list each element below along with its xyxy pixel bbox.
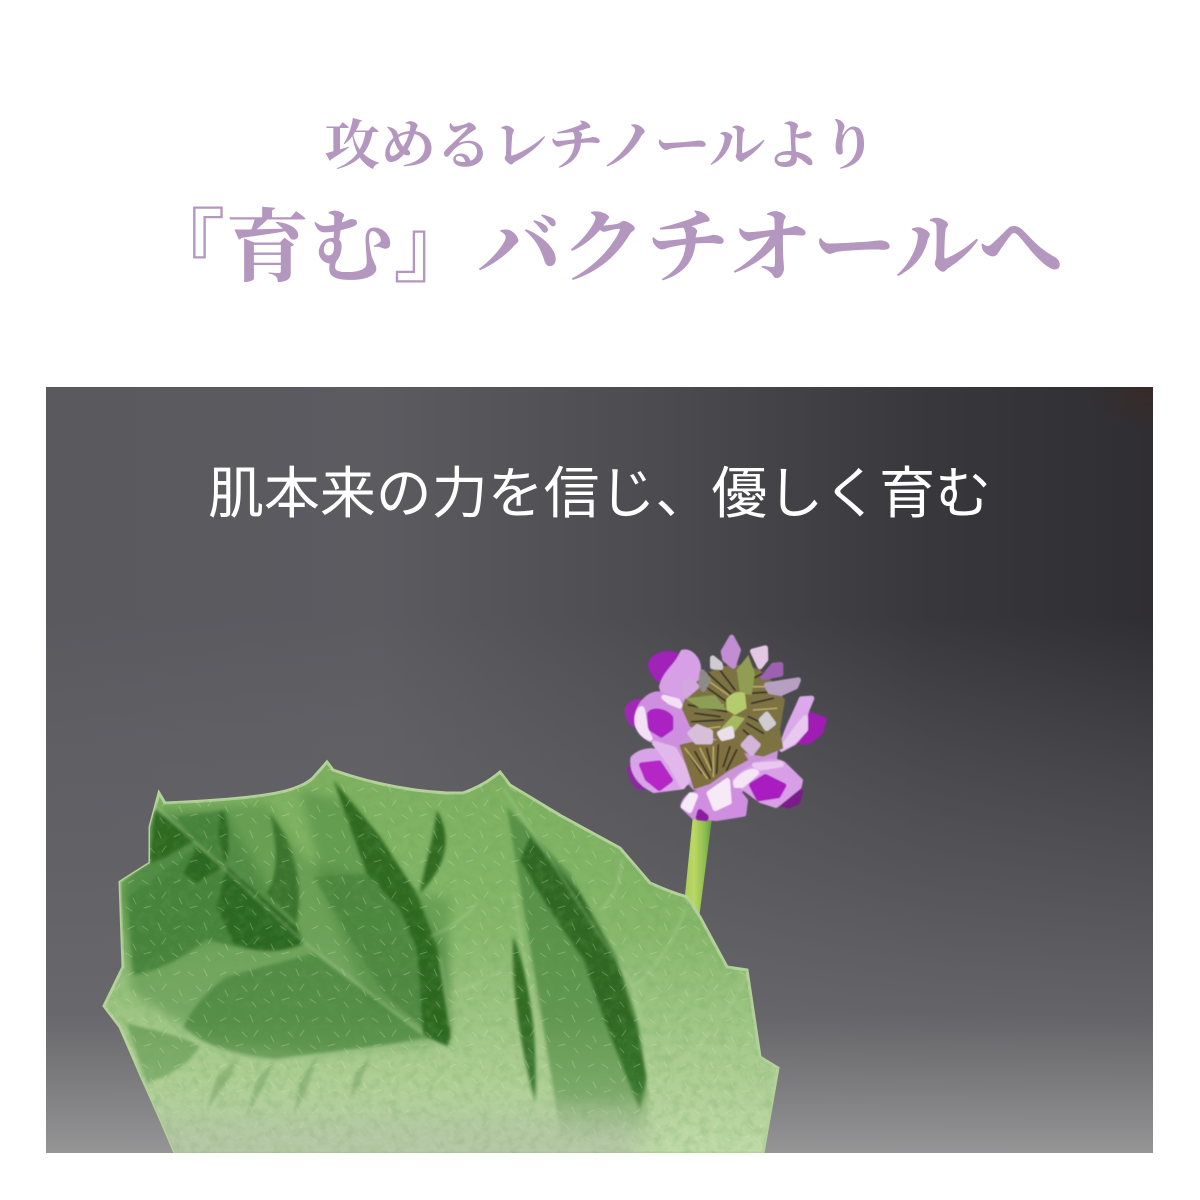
pink petals	[633, 652, 812, 818]
illustration: leaf	[90, 755, 790, 1175]
flower centre: olive sepals	[679, 655, 785, 789]
leaf shading: left half	[127, 780, 450, 1117]
illustration: flower stem	[684, 815, 712, 926]
white highlights	[637, 697, 805, 810]
back petals	[627, 654, 824, 806]
leaf veins	[156, 788, 687, 1102]
leaf broad shading	[120, 790, 450, 1053]
leaf shading: right half	[417, 807, 648, 1153]
flower base mass	[663, 670, 780, 797]
title: line 2: 『育む』バクチオールへ	[141, 205, 1063, 293]
sepal green highlights	[737, 655, 755, 695]
leaf hairs and texture	[100, 755, 790, 1155]
title: line 1: 攻めるレチノールより	[324, 116, 877, 176]
panel: photo background	[46, 387, 1153, 1153]
panel heading: 肌本来の力を信じ、優しく育む	[208, 462, 991, 525]
leaf bottom fade	[160, 1114, 640, 1153]
centre bud	[726, 692, 747, 715]
magenta petal centres	[642, 711, 784, 818]
pale lilac buds	[685, 637, 798, 753]
illustration: flower head	[627, 637, 824, 818]
